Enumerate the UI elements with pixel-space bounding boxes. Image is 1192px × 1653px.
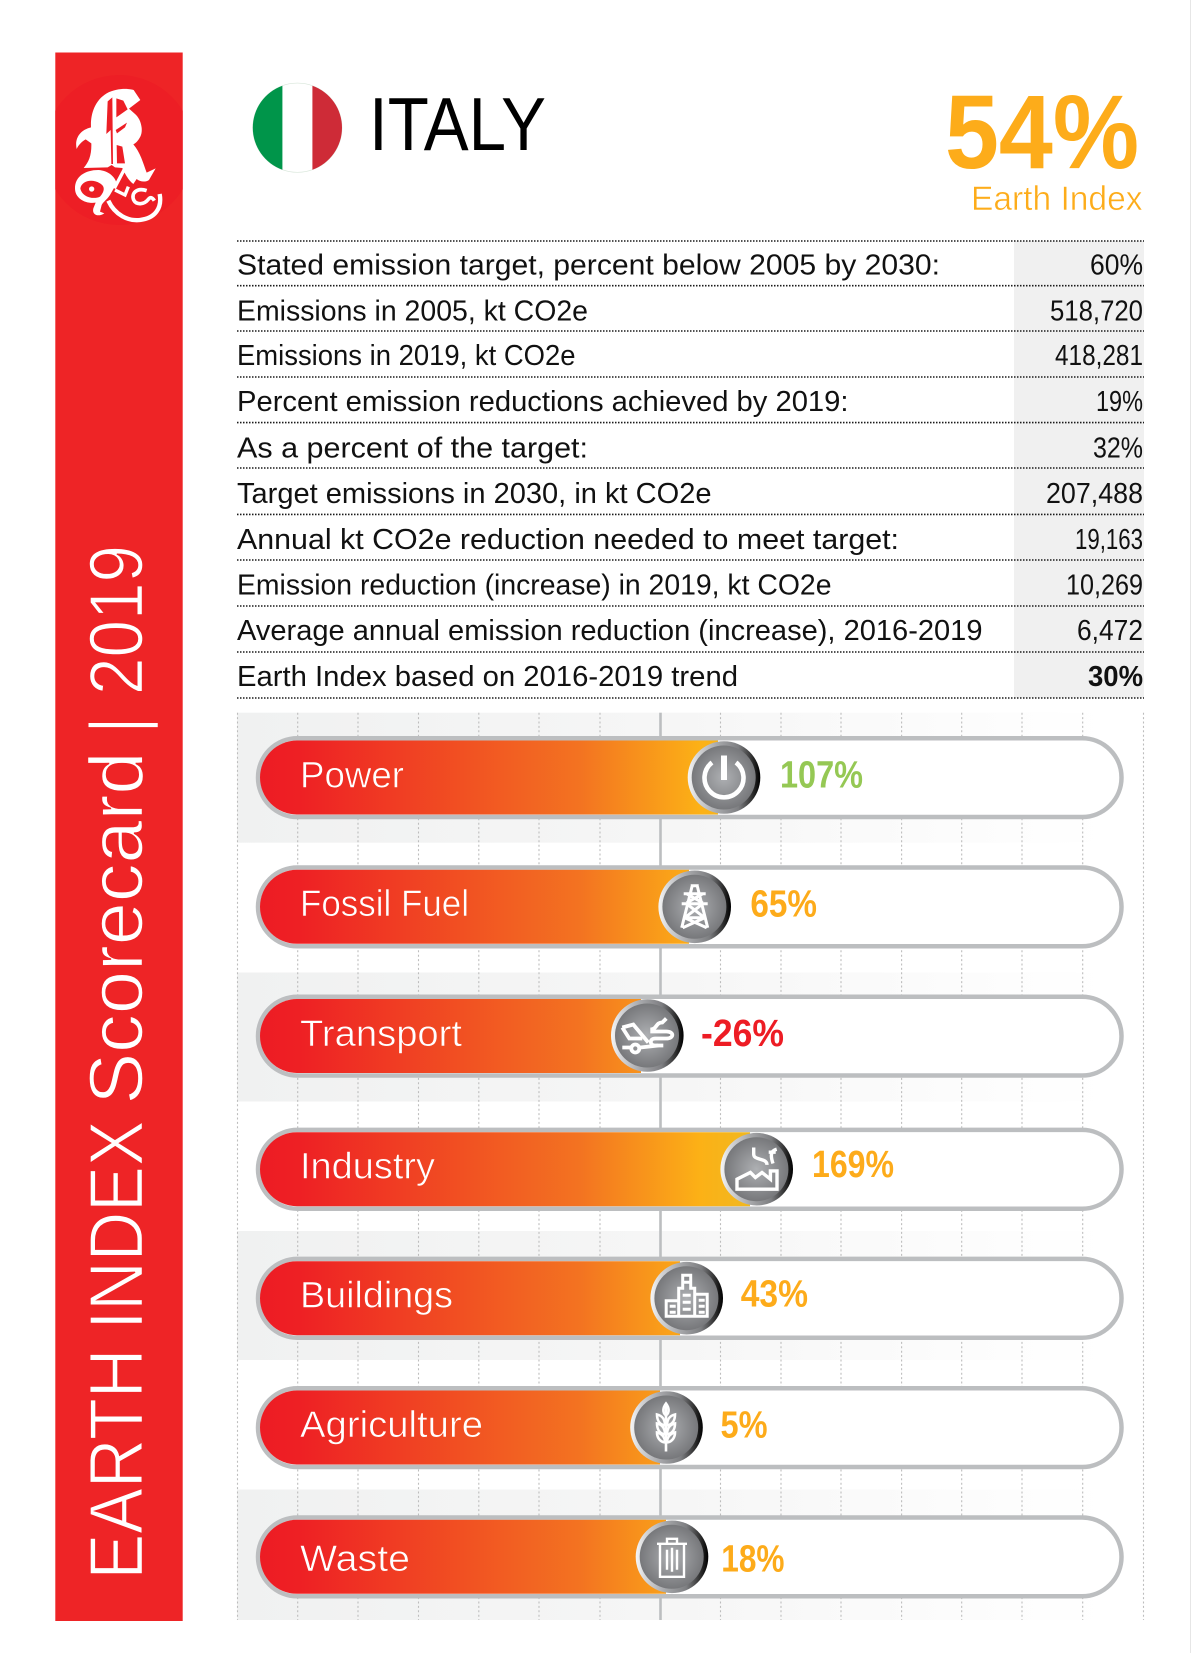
logo circle <box>55 110 183 190</box>
table row 7 <box>237 524 1143 556</box>
sidebar title: Scorecard <box>75 752 160 1104</box>
table row 6: 207,488 <box>1046 478 1143 510</box>
bar: Transport <box>258 997 1122 1076</box>
table: emission statistics <box>237 241 1144 698</box>
label: Power: Power <box>300 755 404 796</box>
table row 4 <box>237 386 1143 418</box>
bar: Fossil Fuel <box>258 868 1122 946</box>
icon: factory smoke <box>720 1133 793 1206</box>
table row 5: 32% <box>1093 432 1143 464</box>
table row 9: Average annual emission reduction (increase), 2016-2019 <box>237 615 982 647</box>
bar: Industry <box>258 1130 1122 1209</box>
panel: red sidebar <box>55 52 183 1621</box>
table row 2: 518,720 <box>1050 295 1143 327</box>
title: country name: ITALY <box>369 82 546 166</box>
table row 9: 6,472 <box>1077 615 1143 647</box>
chart background bands and grid <box>237 713 1144 1620</box>
table row 2: Emissions in 2005, kt CO2e <box>237 295 588 327</box>
table row 4: 19% <box>1096 386 1143 418</box>
table row 5: As a percent of the target: <box>237 432 588 464</box>
icon: trash bin <box>636 1520 708 1593</box>
table row 8 <box>237 570 1143 602</box>
icon: car exhaust <box>611 999 684 1072</box>
icon: power button <box>688 741 760 814</box>
table row 10: Earth Index based on 2016-2019 trend <box>237 661 738 693</box>
page edge line <box>1190 0 1191 1653</box>
value: Agriculture: 5% <box>720 1404 768 1446</box>
label: Waste: Waste <box>300 1538 410 1579</box>
bar: Agriculture <box>258 1388 1122 1467</box>
headline: Earth Index value: 54% <box>945 74 1139 191</box>
table row 8: 10,269 <box>1066 570 1143 602</box>
sidebar title: 2019 <box>75 545 160 695</box>
bar: Buildings <box>258 1259 1122 1338</box>
bar: Power <box>258 738 1122 817</box>
table row 2 <box>237 295 1143 327</box>
icon: Italian flag <box>253 83 342 172</box>
table row 1: Stated emission target, percent below 2005 by 2030: <box>237 250 940 282</box>
icon: logo monogram <box>75 89 160 220</box>
table row 5 <box>237 432 1143 464</box>
table row 7: Annual kt CO2e reduction needed to meet target: <box>237 524 899 556</box>
icon: oil derrick <box>658 870 731 943</box>
label: Buildings: Buildings <box>300 1274 453 1315</box>
table row 7: 19,163 <box>1075 524 1143 556</box>
table row 10: 30% <box>1088 661 1143 693</box>
table row 6: Target emissions in 2030, in kt CO2e <box>237 478 712 510</box>
table row 3: Emissions in 2019, kt CO2e <box>237 340 576 372</box>
value: Waste: 18% <box>721 1538 784 1580</box>
label: Fossil Fuel: Fossil Fuel <box>300 883 469 924</box>
icon: city buildings <box>650 1262 723 1334</box>
headline label: Earth Index <box>971 180 1142 218</box>
label: Transport: Transport <box>300 1013 463 1054</box>
value: Transport: -26% <box>701 1013 784 1055</box>
value: Industry: 169% <box>812 1144 894 1186</box>
sidebar title: | <box>75 715 160 735</box>
value: Power: 107% <box>780 754 863 796</box>
value: Buildings: 43% <box>741 1274 808 1316</box>
table row 3: 418,281 <box>1055 340 1143 372</box>
table row 3 <box>237 340 1143 372</box>
label: Industry: Industry <box>300 1146 436 1187</box>
table row 10 <box>237 661 1143 693</box>
icon: wheat <box>630 1391 703 1464</box>
sidebar title: EARTH INDEX <box>75 1120 160 1580</box>
value: Fossil Fuel: 65% <box>750 884 817 926</box>
table row 8: Emission reduction (increase) in 2019, kt CO2e <box>237 570 832 602</box>
table row 6 <box>237 478 1143 510</box>
bar: Waste <box>258 1518 1122 1596</box>
label: Agriculture: Agriculture <box>300 1404 483 1445</box>
sidebar title <box>75 545 160 1580</box>
table row 4: Percent emission reductions achieved by 2019: <box>237 386 848 418</box>
table row 1: 60% <box>1090 250 1143 282</box>
